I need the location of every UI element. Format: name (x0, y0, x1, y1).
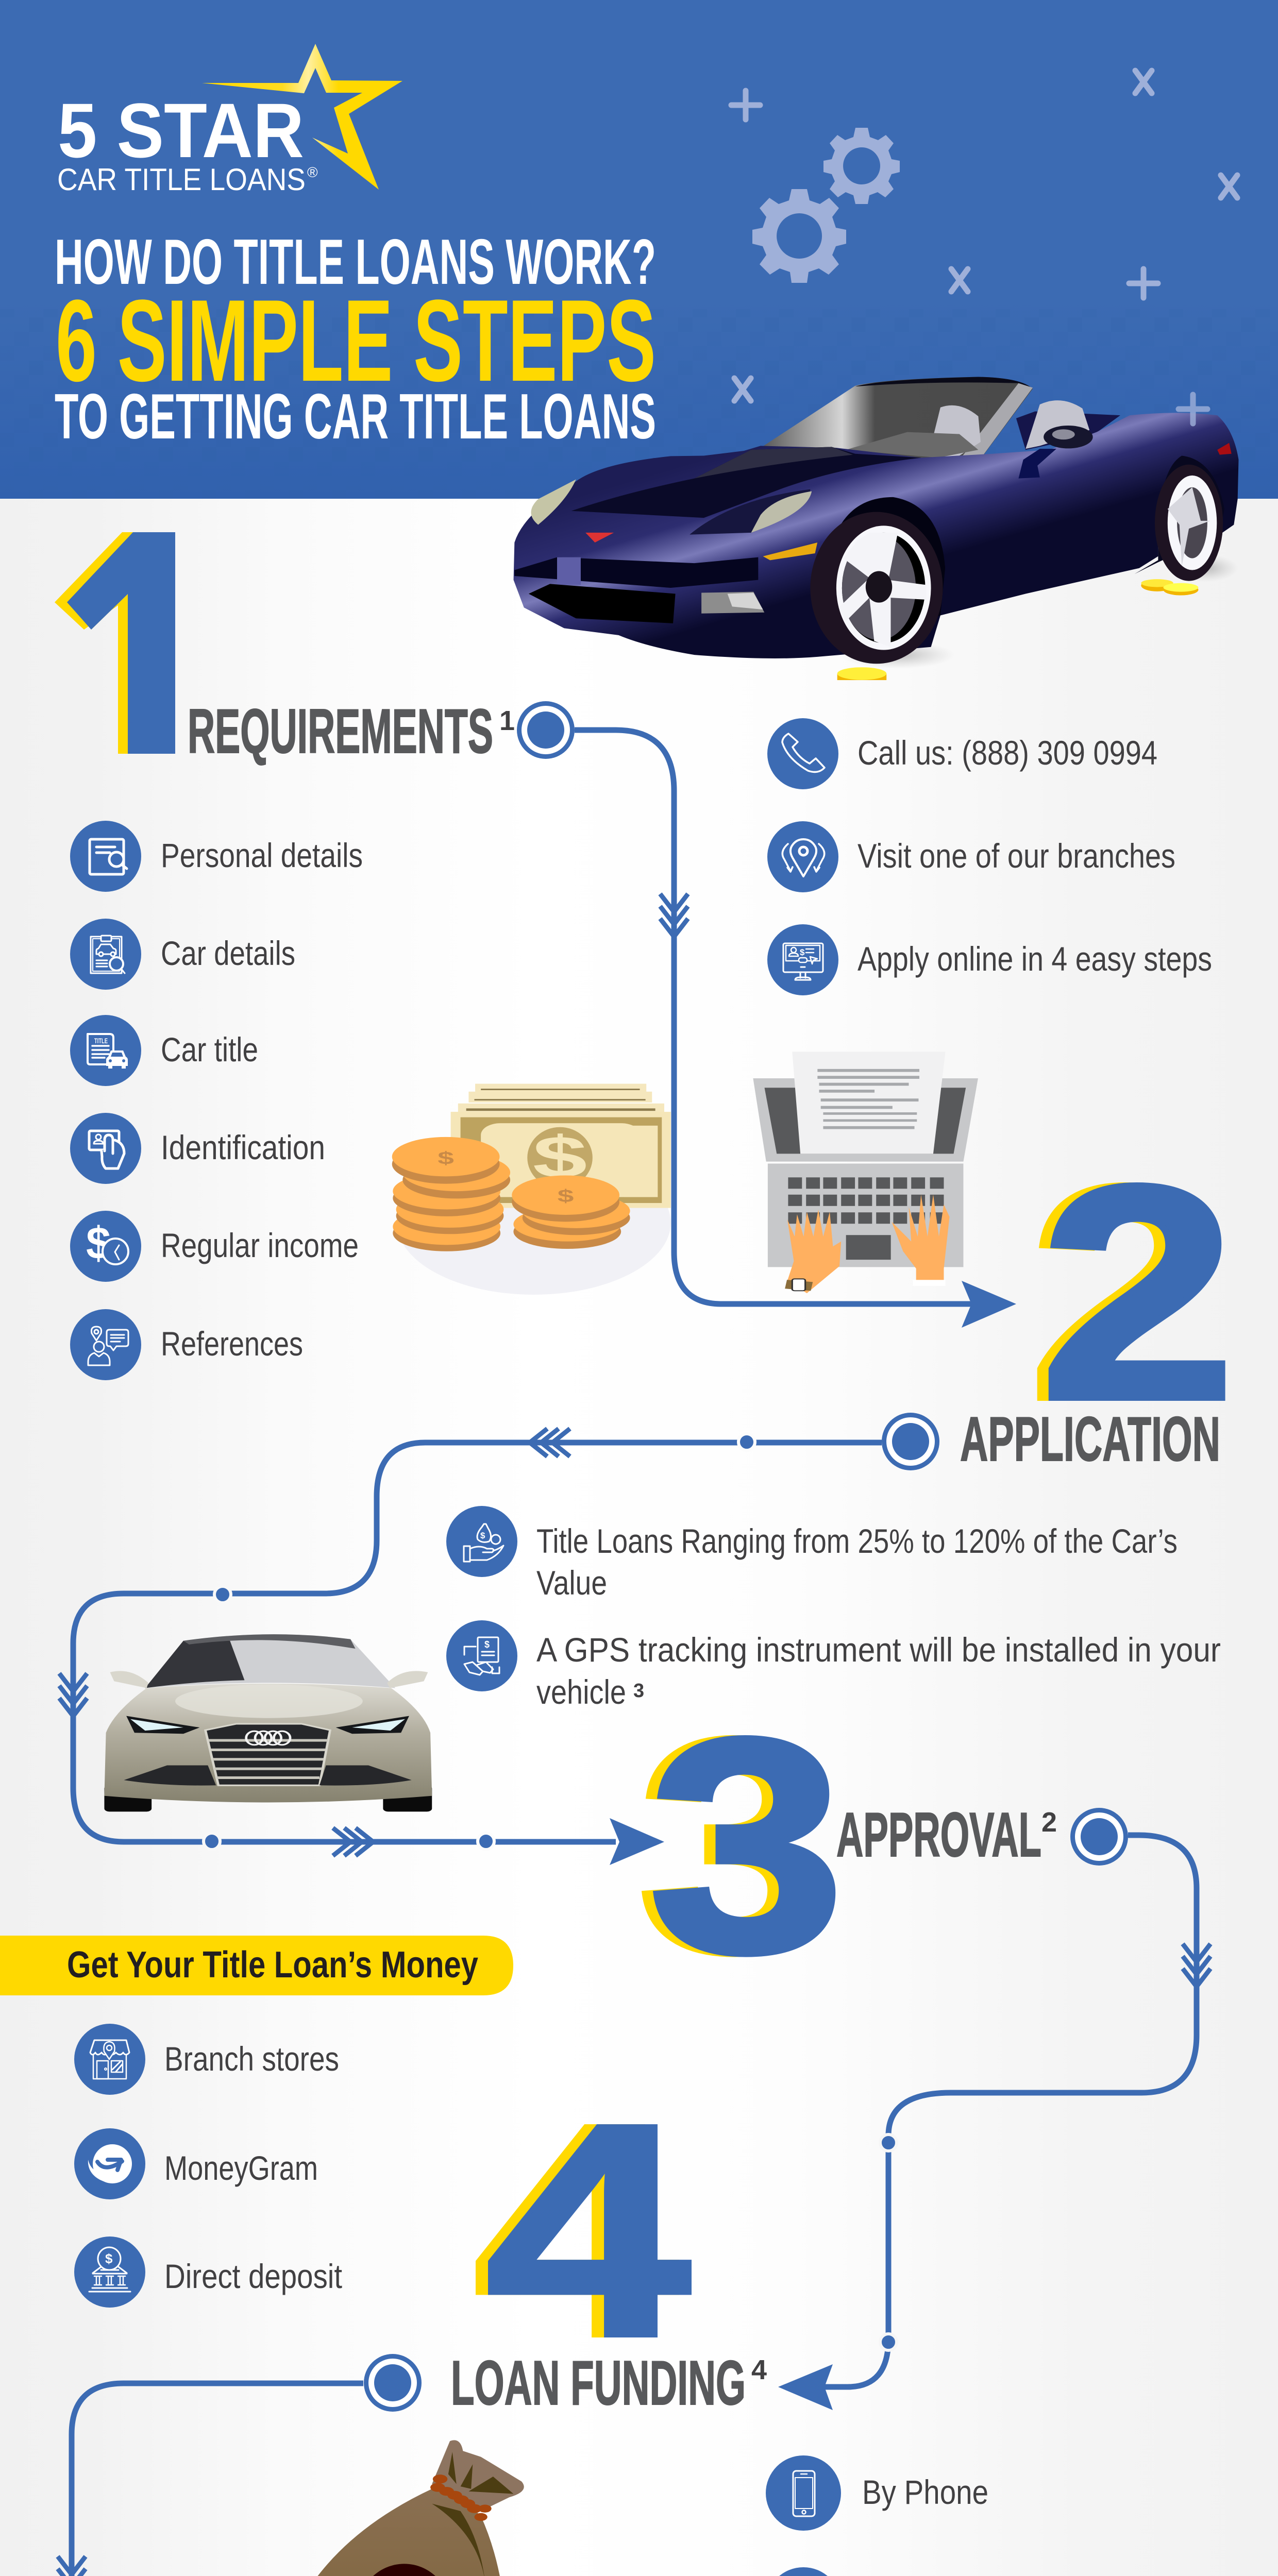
big number 3: 3 (649, 1676, 845, 2015)
illustration: laptop with hands (753, 1052, 978, 1293)
decorative plus and cross marks (731, 71, 1237, 401)
big number 1: 1 (62, 479, 231, 819)
heading: approval: APPROVAL (836, 1800, 1041, 1870)
text: loan range: Value (536, 1564, 607, 1602)
icon: gps agreement: $ (484, 1639, 490, 1650)
text: loan range (536, 1522, 1178, 1602)
illustration: cash and coins: $ (533, 1124, 587, 1190)
heading: approval (836, 1800, 1057, 1870)
big number 3: 3 (637, 1676, 833, 2015)
icon: car details (70, 919, 141, 990)
connector: step 2 to step 3 (59, 1429, 882, 1865)
text: identification: Identification (161, 1128, 325, 1166)
marker: requirements (517, 701, 575, 759)
icon: apply online monitor (767, 924, 838, 995)
illustration: cash and coins: $ (558, 1186, 574, 1206)
banner: get your money (0, 1936, 513, 1995)
title: HOW DO TITLE LOANS WORK? (55, 227, 656, 298)
text: by phone: By Phone (862, 2473, 988, 2511)
icon: regular income (70, 1211, 141, 1282)
icon: online payments (766, 2567, 841, 2576)
text: car details: Car details (161, 934, 295, 972)
banner: get your money: Get Your Title Loan’s Money (67, 1944, 478, 1986)
text: gps: vehicle (536, 1673, 626, 1711)
marker: loan funding (364, 2354, 422, 2412)
icon: regular income: $ (86, 1217, 111, 1268)
logo: CAR TITLE LOANS (57, 162, 306, 197)
marker: approval (1070, 1808, 1128, 1866)
icon: apply online monitor: $ (800, 947, 805, 957)
icon: car title (70, 1015, 141, 1086)
panel: application details (446, 1506, 1221, 1711)
icon: branches pin (767, 821, 838, 892)
icon: phone (767, 718, 838, 789)
text: direct deposit: Direct deposit (164, 2257, 342, 2295)
heading: requirements: 1 (499, 705, 515, 736)
icon: by phone (766, 2455, 841, 2531)
illustration: money bag and coins (202, 2440, 573, 2576)
icon: gps agreement (446, 1620, 517, 1691)
logo (57, 44, 402, 197)
title: TO GETTING CAR TITLE LOANS (55, 381, 656, 452)
marker: application (882, 1413, 939, 1470)
text: regular income: Regular income (161, 1226, 359, 1264)
icon: branch store (74, 2024, 145, 2095)
decorative plus over car (1179, 395, 1207, 423)
text: references: References (161, 1325, 303, 1363)
illustration: cash and coins: $ (438, 1148, 454, 1168)
connector: step 1 to step 2 (575, 730, 1016, 1328)
panel: application options (767, 718, 1212, 995)
text: gps: A GPS tracking instrument will be installed in your (536, 1631, 1221, 1669)
title: 6 SIMPLE STEPS (56, 275, 656, 405)
text: branches: Visit one of our branches (857, 837, 1175, 875)
icon: loan range: $ (480, 1531, 485, 1540)
title (55, 227, 656, 452)
heading: loan funding: LOAN FUNDING (451, 2348, 746, 2418)
text: gps: 3 (633, 1680, 644, 1702)
icon: identification (70, 1113, 141, 1184)
heading: requirements: REQUIREMENTS (188, 696, 493, 766)
logo: ® (307, 164, 318, 180)
text: personal details: Personal details (161, 836, 363, 874)
big number 1 (55, 532, 175, 754)
panel: repayment methods (766, 2455, 1162, 2576)
illustration: blue sports car (514, 377, 1239, 680)
text: apply online: Apply online in 4 easy steps (857, 940, 1212, 978)
text: gps (536, 1631, 1221, 1711)
text: branch stores: Branch stores (164, 2040, 339, 2078)
illustration: cash and coins (392, 1084, 671, 1295)
connector: step 3 to step 4 (778, 1835, 1210, 2410)
big number 4: 4 (473, 2061, 681, 2400)
heading: loan funding: 4 (751, 2354, 767, 2385)
icon: loan range (446, 1506, 517, 1577)
icon: moneygram (74, 2128, 145, 2199)
icon: references (70, 1309, 141, 1380)
text: car title: Car title (161, 1030, 258, 1069)
text: moneygram: MoneyGram (164, 2149, 318, 2187)
icon: personal details (70, 821, 141, 892)
heading: requirements (188, 696, 515, 766)
connector: step 4 to step 5 (58, 2383, 363, 2576)
big number 2: 2 (1040, 1123, 1236, 1463)
icon: gears (752, 128, 900, 283)
big number 4: 4 (485, 2061, 694, 2400)
logo: 5 STAR (58, 87, 304, 174)
illustration: silver sedan (104, 1634, 432, 1811)
icon: direct deposit: $ (105, 2251, 113, 2266)
panel: header (0, 0, 1278, 499)
icon: direct deposit (74, 2236, 145, 2308)
panel: requirement list (70, 821, 363, 1380)
panel: funding options (74, 2024, 342, 2308)
heading: loan funding (451, 2348, 767, 2418)
text: call us: Call us: (888) 309 0994 (857, 734, 1157, 772)
heading: approval: 2 (1041, 1807, 1057, 1838)
big number 2: 2 (1029, 1123, 1224, 1463)
icon: car title: TITLE (94, 1037, 108, 1045)
